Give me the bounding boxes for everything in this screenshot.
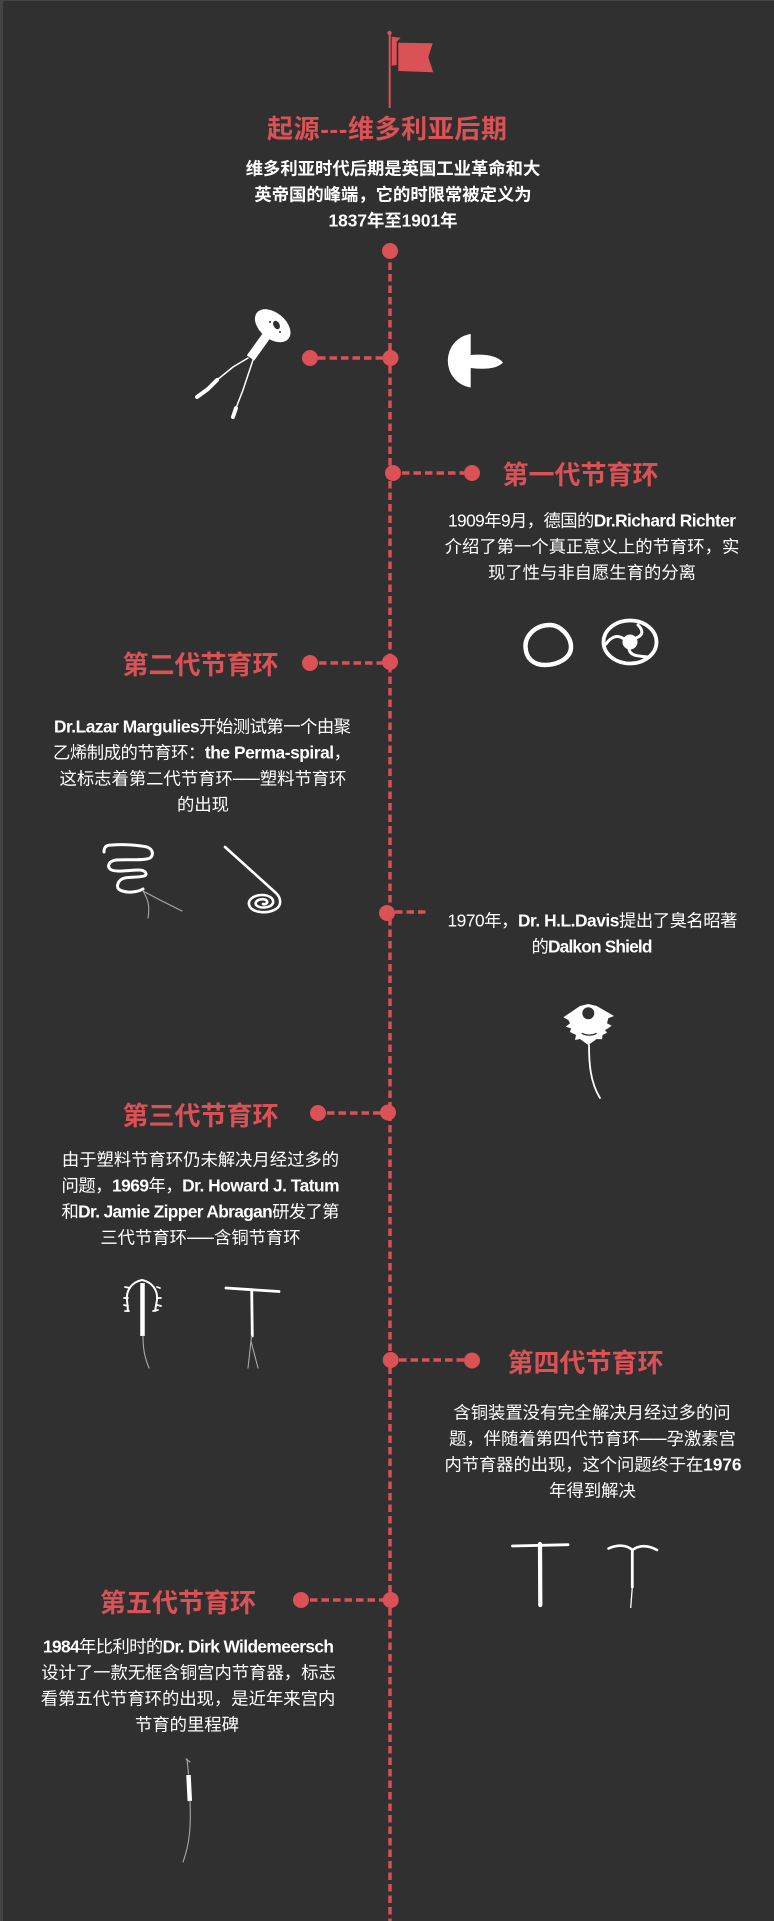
text block: second generation — [53, 716, 351, 814]
text block: second generation: 塑料节育环 — [260, 768, 346, 788]
text block: third generation — [62, 1150, 340, 1248]
connector: second generation — [302, 654, 398, 671]
text block: origin description: 1837年至1901年 — [328, 210, 458, 230]
icon: Perma-spiral device — [104, 845, 182, 918]
heading: second generation: 第二代节育环 — [122, 650, 279, 680]
icon: coil device — [225, 847, 280, 912]
text block: first generation: 现了性与非自愿生育的分离 — [488, 562, 696, 582]
text block: second generation: 乙烯制成的节育环：the Perma-spiral， — [53, 742, 351, 762]
connector: fourth generation — [383, 1352, 480, 1368]
heading: first generation: 第一代节育环 — [502, 460, 659, 490]
connector: early devices — [302, 350, 398, 366]
text block: fifth generation: 1984年比利时的Dr. Dirk Wildemeersch — [43, 1636, 334, 1656]
icon: ring with spiral centre — [604, 620, 656, 664]
icon: red flag — [387, 31, 433, 108]
text block: fourth generation: —— — [640, 1431, 667, 1446]
text block: first generation: 1909年9月，德国的Dr.Richard Richter — [448, 510, 736, 530]
connector: first generation — [385, 465, 480, 481]
text block: fourth generation: 含铜装置没有完全解决月经过多的问 — [453, 1402, 731, 1422]
text block: second generation: —— — [233, 771, 260, 786]
heading: origin: 起源---维多利亚后期 — [267, 114, 507, 144]
text block: second generation: 的出现 — [177, 794, 229, 814]
text block: third generation: 和Dr. Jamie Zipper Abragan研发了第 — [62, 1202, 340, 1222]
text block: fourth generation: 内节育器的出现，这个问题终于在1976 — [444, 1454, 742, 1474]
icon: barbed copper device — [124, 1280, 161, 1368]
text block: third generation: 问题，1969年，Dr. Howard J. Tatum — [62, 1176, 340, 1196]
text block: fourth generation: 年得到解决 — [549, 1480, 636, 1500]
text block: Dalkon Shield — [448, 910, 738, 956]
icon: hormonal Y device — [608, 1546, 657, 1608]
text block: fifth generation: 设计了一款无框含铜宫内节育器，标志 — [41, 1662, 336, 1682]
text block: fifth generation: 节育的里程碑 — [135, 1714, 239, 1734]
text block: fifth generation: 看第五代节育环的出现，是近年来宫内 — [41, 1688, 335, 1708]
icon: mushroom pessary — [448, 334, 503, 388]
timeline node: origin — [382, 243, 398, 259]
text block: origin description — [246, 158, 540, 230]
text block: Dalkon Shield: 的Dalkon Shield — [532, 936, 652, 956]
text block: first generation — [445, 510, 739, 582]
connector: fifth generation — [293, 1592, 399, 1608]
icon: wishbone stem pessary — [197, 303, 297, 417]
timeline spine — [388, 251, 392, 1921]
heading: fourth generation: 第四代节育环 — [507, 1348, 664, 1378]
text block: fourth generation: 孕激素宫 — [667, 1428, 736, 1448]
text block: third generation: —— — [187, 1230, 214, 1245]
icon: copper T device — [226, 1288, 279, 1368]
icon: Dalkon Shield — [563, 1004, 614, 1098]
text block: Dalkon Shield: 1970年，Dr. H.L.Davis提出了臭名昭著 — [448, 910, 738, 930]
text block: fourth generation: 题，伴随着第四代节育环 — [449, 1428, 640, 1448]
icon: ring device — [525, 625, 571, 665]
text block: third generation: 由于塑料节育环仍未解决月经过多的 — [62, 1150, 339, 1170]
text block: origin description: 维多利亚时代后期是英国工业革命和大 — [246, 158, 540, 178]
text block: second generation: 这标志着第二代节育环 — [60, 768, 233, 788]
text block: origin description: 英帝国的峰端，它的时限常被定义为 — [254, 184, 532, 204]
text block: third generation: 三代节育环 — [100, 1228, 187, 1248]
text block: fourth generation — [444, 1402, 742, 1500]
text block: fifth generation — [41, 1636, 336, 1734]
text block: third generation: 含铜节育环 — [214, 1228, 301, 1248]
heading: third generation: 第三代节育环 — [122, 1101, 279, 1131]
text block: second generation: Dr.Lazar Margulies开始测试第一个由聚 — [54, 716, 351, 736]
heading: fifth generation: 第五代节育环 — [100, 1588, 256, 1618]
connector: third generation — [310, 1104, 396, 1121]
icon: hormonal T device — [512, 1544, 568, 1605]
text block: first generation: 介绍了第一个真正意义上的节育环，实 — [445, 536, 739, 556]
connector: Dalkon Shield — [379, 905, 427, 921]
icon: frameless copper device — [183, 1759, 190, 1862]
